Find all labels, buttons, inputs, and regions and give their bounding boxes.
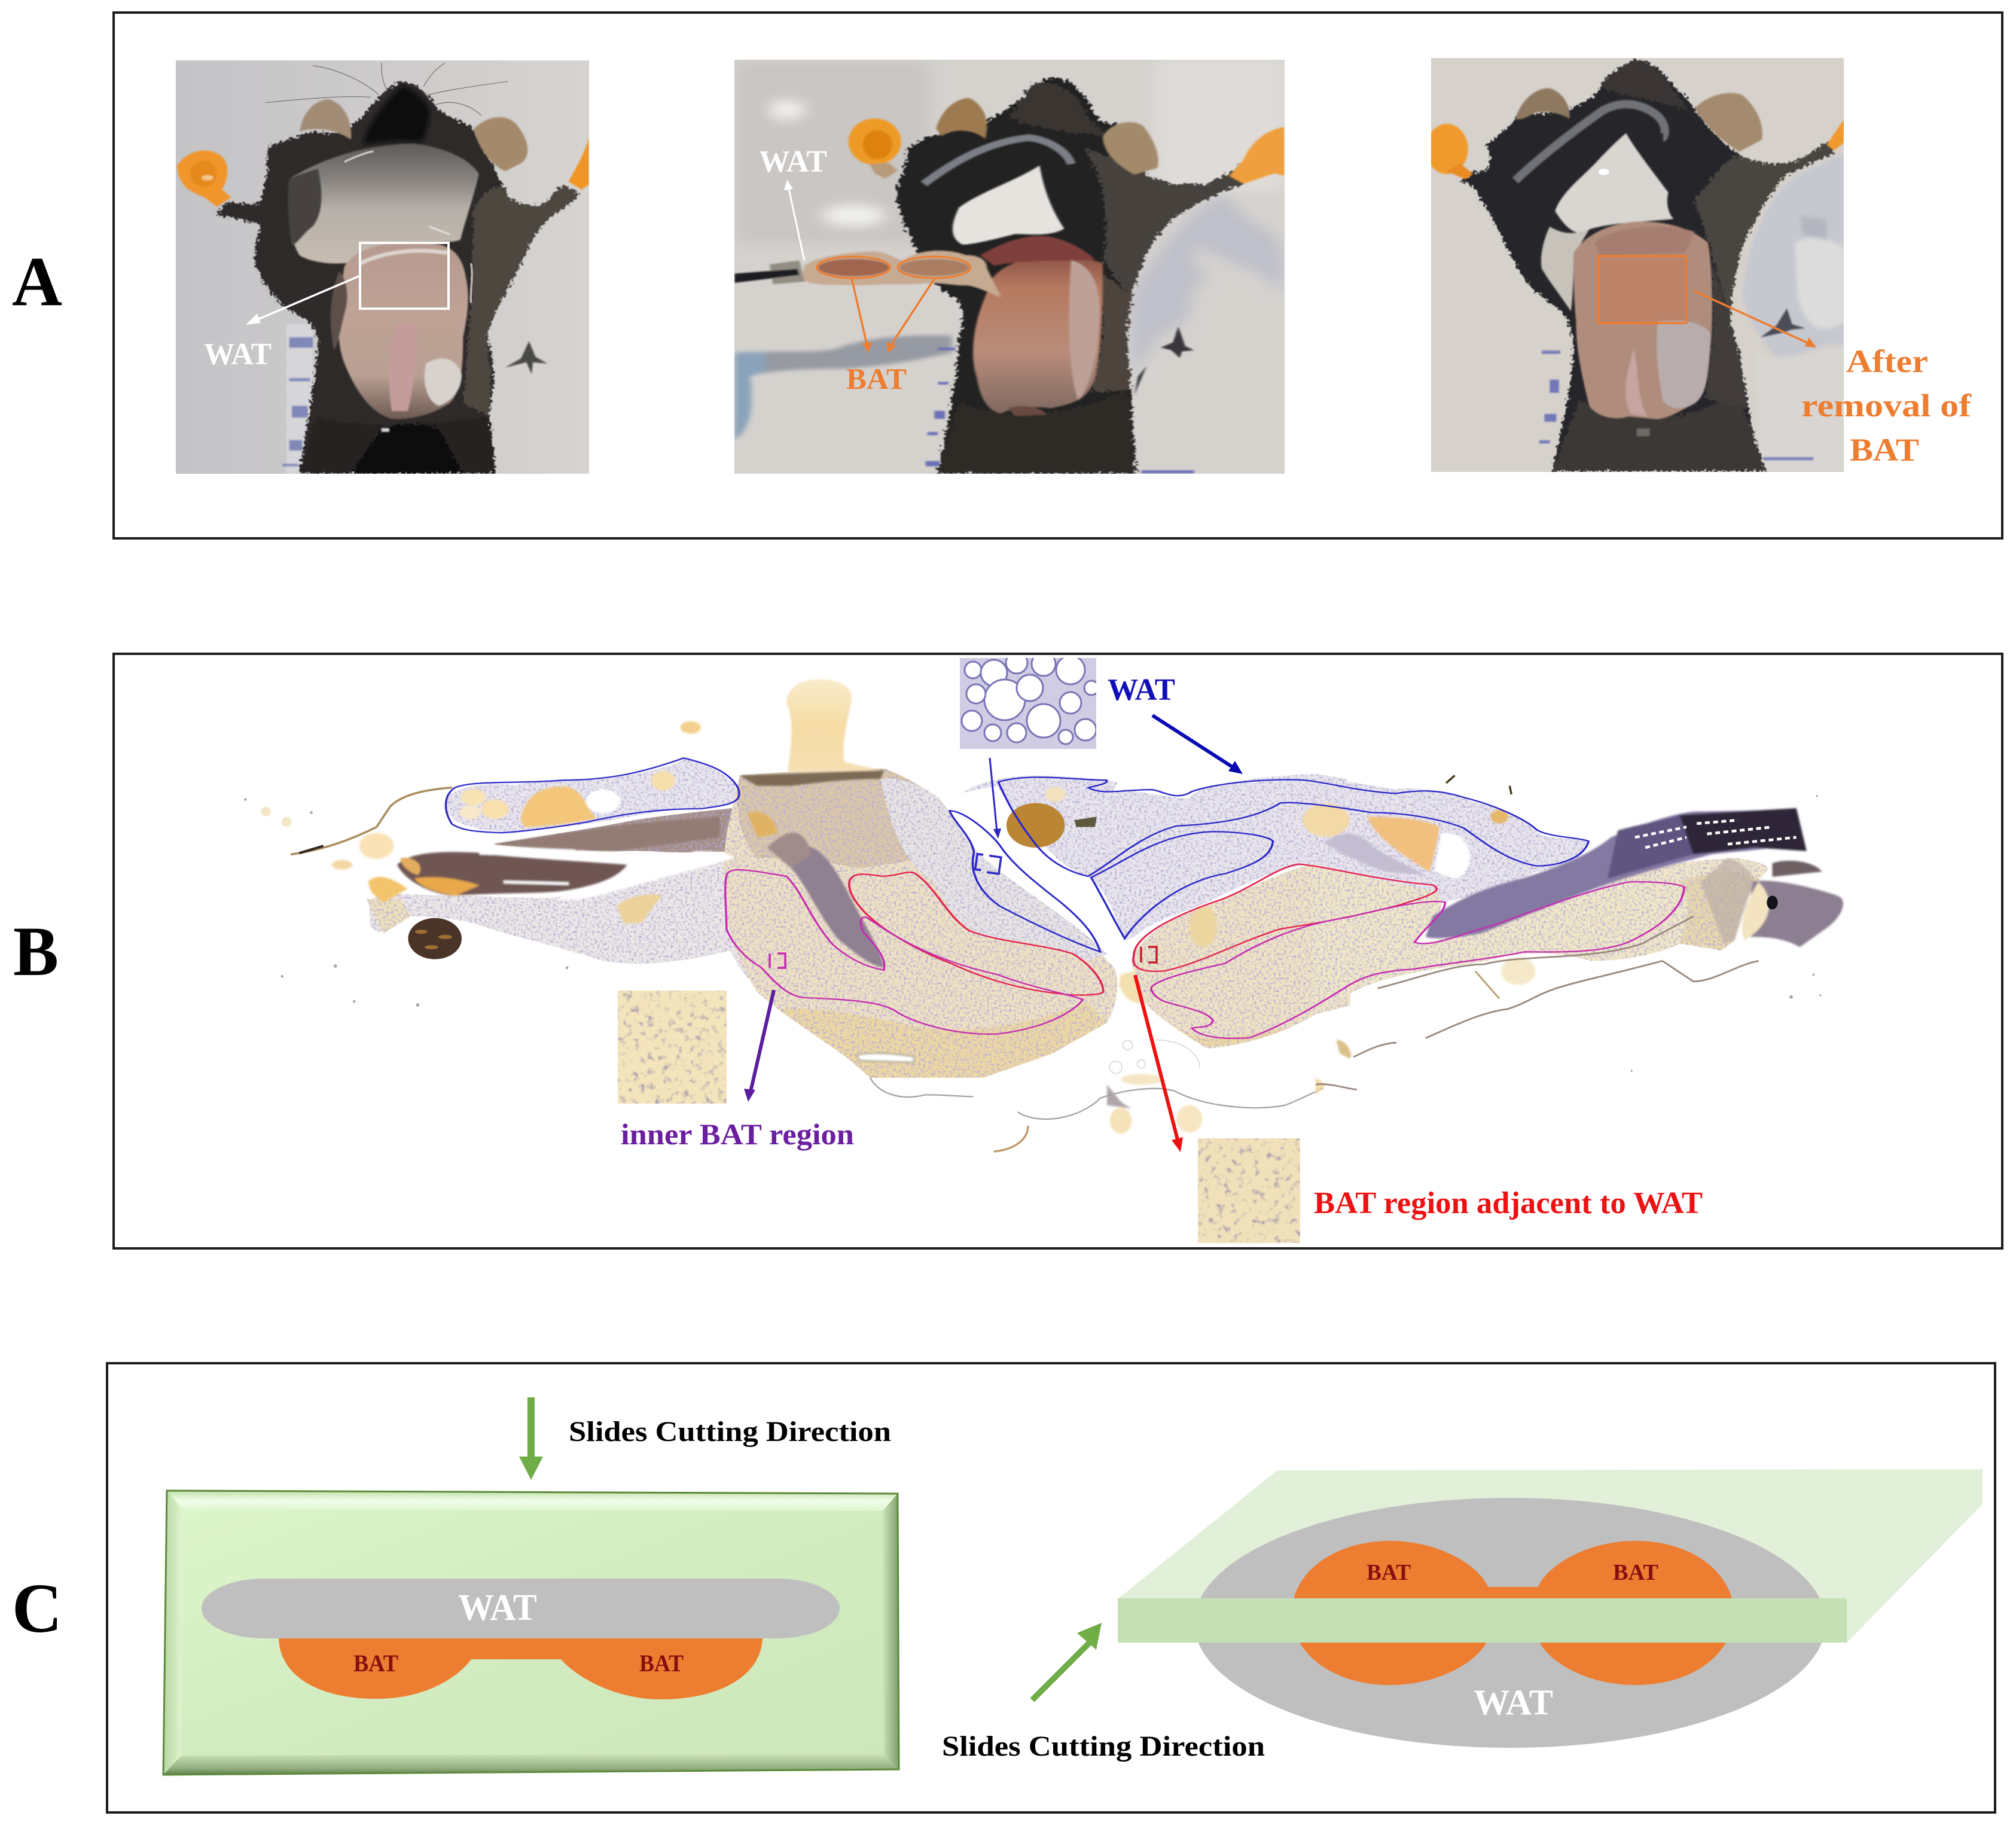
textured tissue base <box>366 758 1769 1078</box>
chest <box>1555 133 1673 233</box>
diagram: perspective view <box>1118 1469 1983 1748</box>
ears <box>300 100 351 139</box>
label A: A <box>12 242 62 321</box>
arrow: from WAT inset <box>990 758 1001 839</box>
label C: C <box>12 1569 62 1647</box>
inset: BAT adjacent to WAT micrograph <box>1198 1138 1300 1243</box>
label: BAT right: BAT <box>1613 1560 1658 1585</box>
fur <box>896 77 1243 474</box>
belly <box>338 242 468 419</box>
label: BAT left: BAT <box>1367 1560 1411 1585</box>
restraint caps <box>1426 124 1468 174</box>
panel C: cutting direction diagrams <box>12 1363 1995 1812</box>
label: After removal of BAT: BAT <box>1850 432 1919 468</box>
label: WAT: WAT <box>759 145 827 179</box>
outlines: WAT regions (blue) <box>446 758 1588 952</box>
BAT shape <box>279 1637 763 1699</box>
label: After removal of BAT: After <box>1846 343 1928 379</box>
panel B: histology section <box>13 652 2002 1248</box>
inset: WAT micrograph <box>960 652 1099 749</box>
gap under connector <box>1488 1599 1538 1677</box>
photo 3: mouse after removal of BAT <box>1426 58 1844 472</box>
left part details <box>332 721 777 923</box>
right part <box>1312 776 1769 1014</box>
label: BAT: BAT <box>846 362 907 395</box>
label: BAT region adjacent to WAT: BAT region adjacent to WAT <box>1314 1186 1703 1220</box>
arrow: slides cutting direction, top view <box>519 1397 543 1480</box>
slide plane <box>1118 1469 1983 1643</box>
label: WAT: WAT <box>1474 1683 1553 1722</box>
panel A: mouse dissection photos <box>12 13 2002 538</box>
outlines: BAT adjacent to WAT (red) <box>849 864 1436 995</box>
annotation: orange box and arrow <box>1598 256 1816 348</box>
BAT shape <box>1292 1541 1734 1685</box>
open abdomen <box>973 258 1103 413</box>
annotation: WAT arrow <box>784 179 804 261</box>
photo 2: dissected tissue held with forceps <box>734 60 1285 474</box>
markers: sampled fields <box>770 854 1157 968</box>
outlines: inner BAT (magenta) <box>725 870 1684 1038</box>
slide plate <box>163 1491 899 1775</box>
diagram: top view on beveled slide <box>163 1491 899 1775</box>
chest skin <box>288 144 479 264</box>
tuft <box>505 341 547 374</box>
tissue section <box>244 680 1843 1151</box>
label: inner BAT region: inner BAT region <box>621 1117 854 1151</box>
label: Slides Cutting Direction: Slides Cutting Direction <box>569 1416 891 1448</box>
inset: inner BAT micrograph <box>618 991 727 1104</box>
arrow: to WAT <box>1152 715 1243 774</box>
arrow: BAT adjacent to WAT <box>1135 975 1183 1152</box>
annotation: white box and WAT arrow <box>246 243 449 325</box>
center-left main mass <box>724 769 1350 1078</box>
label: Slides Cutting Direction: Slides Cutting Direction <box>942 1730 1265 1762</box>
photo 1: mouse with white adipose tissue <box>176 60 589 474</box>
tufts <box>1161 327 1194 358</box>
center details <box>740 680 1323 1151</box>
right details <box>1303 775 1843 1095</box>
open abdomen <box>1573 221 1712 419</box>
arrow: inner BAT <box>744 990 774 1102</box>
restraint caps <box>849 118 901 165</box>
label: BAT left: BAT <box>353 1650 398 1677</box>
fur <box>215 81 579 474</box>
WAT shape <box>202 1579 840 1638</box>
label: After removal of BAT: removal of <box>1801 388 1972 424</box>
label: WAT: WAT <box>1108 673 1175 707</box>
right lobes <box>963 774 1347 940</box>
label: BAT right: BAT <box>639 1650 684 1677</box>
label B: B <box>13 912 59 991</box>
tissue held by forceps <box>801 251 1001 297</box>
label: WAT: WAT <box>458 1588 537 1628</box>
restraint caps <box>177 151 231 207</box>
label: After removal of BAT <box>1801 343 1972 468</box>
label: WAT: WAT <box>204 337 272 371</box>
WAT ellipse <box>1194 1498 1826 1748</box>
cutting band <box>1118 1598 1847 1643</box>
arrow: slides cutting direction, perspective <box>1032 1623 1102 1700</box>
left part <box>445 758 742 831</box>
fur <box>1460 59 1834 471</box>
annotation: BAT ellipses and arrows <box>817 257 971 353</box>
